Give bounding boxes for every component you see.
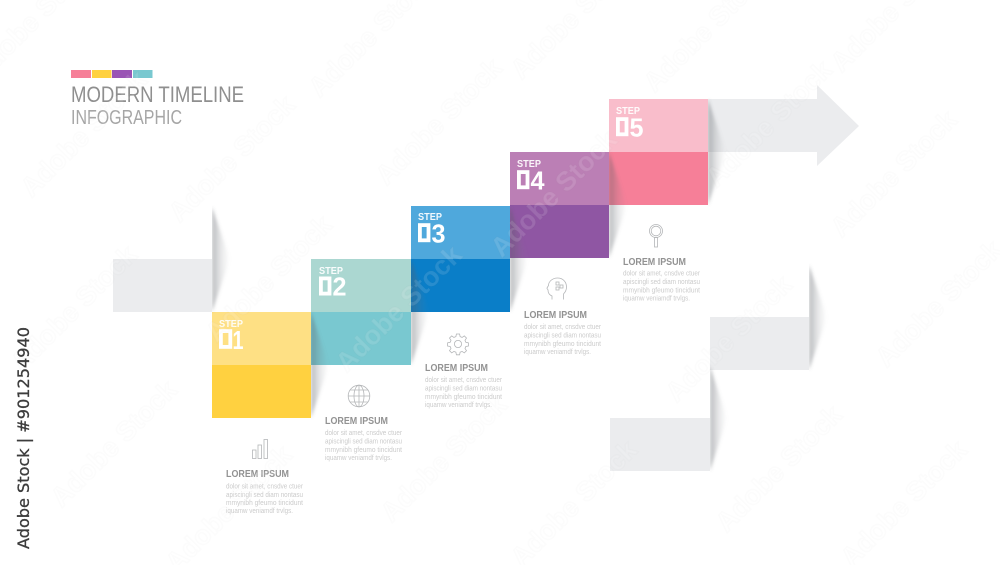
infographic canvas bbox=[16, 70, 859, 550]
step 1 text: LOREM IPSUM bbox=[226, 468, 289, 480]
step 5 text: dolor sit amet, cnsdve ctuer bbox=[623, 270, 701, 278]
step 2 text: iquamw veniamdf trvlgs. bbox=[325, 455, 392, 462]
step 1 block bbox=[212, 312, 311, 418]
step 4 text bbox=[524, 309, 602, 356]
step 5 text bbox=[623, 256, 701, 302]
stock watermark pattern: Adobe Stock bbox=[710, 399, 848, 538]
step 4 block bbox=[510, 152, 609, 258]
title block bbox=[71, 70, 244, 129]
step 2 label bbox=[319, 265, 346, 302]
step 5 text: iquamw veniamdf trvlgs. bbox=[623, 296, 690, 302]
step 3 text: apiscingli sed diam nontasu bbox=[425, 386, 502, 392]
heading: MODERN TIMELINE bbox=[71, 82, 244, 107]
step 3 block bbox=[411, 206, 510, 312]
icon: head with chart bbox=[547, 278, 566, 300]
grey arrow start segment bbox=[113, 259, 212, 312]
step 4 text: LOREM IPSUM bbox=[524, 309, 587, 321]
stock watermark pattern: Adobe Stock bbox=[825, 104, 963, 243]
step 3 text: dolor sit amet, cnsdve ctuer bbox=[425, 377, 503, 384]
icon: bar chart bbox=[252, 440, 268, 458]
step 3 text bbox=[425, 362, 503, 409]
stock watermark pattern: Adobe Stock bbox=[485, 124, 623, 263]
step 3 text: LOREM IPSUM bbox=[425, 362, 488, 374]
step 3 text: mmynibh gfeumo tincidunt bbox=[425, 394, 502, 401]
step 4 label: STEP bbox=[517, 158, 541, 170]
step 4 text: dolor sit amet, cnsdve ctuer bbox=[524, 324, 602, 331]
step 4 text: mmynibh gfeumo tincidunt bbox=[524, 341, 601, 348]
stock watermark pattern: Adobe Stock bbox=[5, 239, 143, 378]
icon: globe bbox=[348, 385, 370, 407]
icon: magnifier bbox=[650, 224, 662, 247]
step 5 block bbox=[609, 99, 708, 205]
step 1 label bbox=[219, 318, 244, 355]
step 1 text: apiscingli sed diam nontasu bbox=[226, 492, 303, 499]
fold shadows bbox=[212, 99, 827, 471]
step 3 text: iquamw veniamdf trvlgs. bbox=[425, 402, 492, 409]
colour swatch bar bbox=[71, 70, 152, 78]
step 2 label: STEP bbox=[319, 265, 343, 277]
step 1 text bbox=[226, 468, 304, 515]
step 3 label: STEP bbox=[418, 211, 442, 223]
step 2 text: LOREM IPSUM bbox=[325, 415, 388, 427]
stock watermark pattern: Adobe Stock bbox=[200, 209, 338, 348]
step 2 text: dolor sit amet, cnsdve ctuer bbox=[325, 430, 403, 437]
step 4 text: apiscingli sed diam nontasu bbox=[524, 332, 601, 340]
vertical stock id text: Adobe Stock | #901254940 bbox=[14, 327, 33, 549]
step 2 label: 2 bbox=[332, 272, 346, 302]
step 2 text bbox=[325, 415, 403, 462]
step 5 text: apiscingli sed diam nontasu bbox=[623, 279, 700, 286]
icon: gear bbox=[448, 334, 468, 355]
step 3 label: 3 bbox=[432, 218, 446, 248]
stock watermark pattern: Adobe Stock bbox=[15, 64, 153, 203]
step 3 label bbox=[418, 211, 446, 248]
step 2 text: mmynibh gfeumo tincidunt bbox=[325, 447, 402, 454]
stock watermark pattern: Adobe Stock bbox=[660, 269, 798, 408]
step 4 label: 4 bbox=[530, 166, 545, 196]
step 5 text: LOREM IPSUM bbox=[623, 256, 686, 268]
step 2 block bbox=[311, 259, 411, 365]
step 1 label: STEP bbox=[219, 318, 243, 330]
step 1 text: iquamw veniamdf trvlgs. bbox=[226, 508, 293, 515]
stock watermark pattern: Adobe Stock bbox=[163, 89, 301, 228]
stock watermark pattern: Adobe Stock bbox=[370, 52, 508, 191]
stock watermark pattern: Adobe Stock bbox=[375, 389, 513, 528]
step 4 label bbox=[517, 158, 545, 196]
step 1 text: mmynibh gfeumo tincidunt bbox=[226, 500, 303, 507]
step 1 label: 1 bbox=[232, 325, 244, 355]
step 5 label bbox=[616, 105, 644, 142]
step 5 label: 5 bbox=[630, 112, 644, 142]
step 2 text: apiscingli sed diam nontasu bbox=[325, 438, 402, 446]
stock watermark pattern: Adobe Stock bbox=[700, 54, 838, 193]
subheading: INFOGRAPHIC bbox=[71, 107, 182, 129]
stock watermark pattern: Adobe Stock bbox=[330, 239, 468, 378]
step 4 text: iquamw veniamdf trvlgs. bbox=[524, 349, 591, 356]
grey return segment lower bbox=[610, 418, 710, 471]
grey return segment upper bbox=[710, 317, 809, 370]
grey arrow head at top right bbox=[708, 85, 859, 166]
stock watermark pattern: Adobe Stock bbox=[45, 374, 183, 513]
step 1 text: dolor sit amet, cnsdve ctuer bbox=[226, 484, 304, 490]
step 5 text: mmynibh gfeumo tincidunt bbox=[623, 288, 700, 294]
step 5 label: STEP bbox=[616, 105, 640, 117]
